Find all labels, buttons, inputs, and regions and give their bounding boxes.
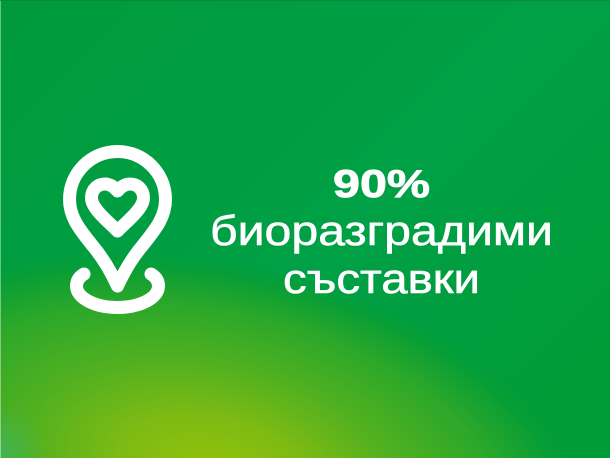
icon: base ring xyxy=(76,274,158,308)
icon: heart xyxy=(92,184,144,231)
text: съставки: съставки xyxy=(283,255,480,302)
heading: 90%: 90% xyxy=(333,163,430,206)
text: биоразградими: биоразградими xyxy=(210,207,553,254)
icon: location pin with heart xyxy=(70,152,166,308)
icon: pin outline xyxy=(70,152,166,286)
